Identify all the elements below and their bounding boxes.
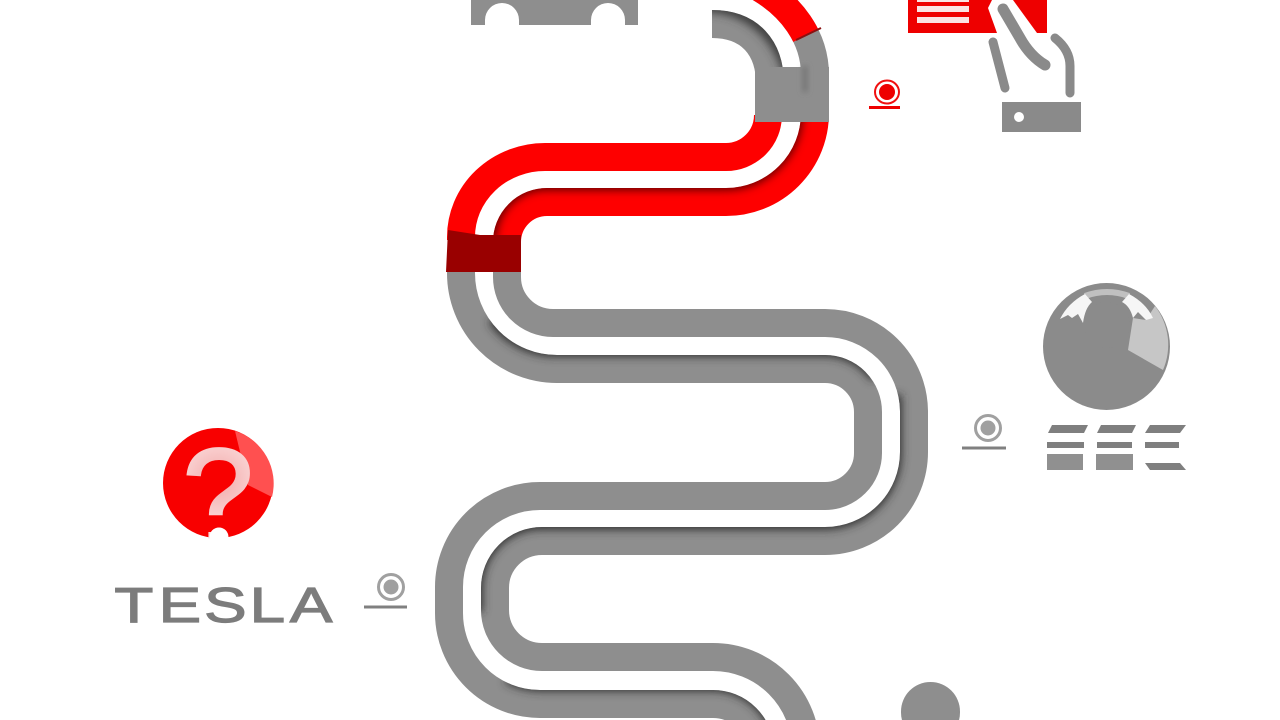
icon: hand holding red card bbox=[908, 0, 1081, 132]
icon: red question sphere bbox=[163, 423, 274, 564]
icon: car underside bbox=[471, 0, 638, 25]
marker: red pin bbox=[869, 80, 900, 109]
icon: grey pin top bottom-right bbox=[901, 682, 960, 720]
road: grey section bbox=[449, 272, 914, 720]
wordmark: TESLA: TESLA bbox=[114, 579, 332, 633]
red card bbox=[908, 0, 1047, 33]
icon: stacked bars block bbox=[1047, 425, 1186, 470]
icon: grey person sphere bbox=[1043, 283, 1170, 410]
question mark: ? bbox=[183, 423, 253, 564]
marker: grey pin right bbox=[962, 416, 1006, 450]
hand outline bbox=[993, 9, 1070, 93]
road: top grey curve and block bbox=[705, 0, 829, 122]
cuff bbox=[1002, 102, 1081, 132]
road: dark red junction block bbox=[446, 230, 521, 272]
road: red section bbox=[461, 113, 815, 242]
winding road bbox=[446, 0, 914, 720]
marker: grey pin left bbox=[364, 574, 407, 608]
